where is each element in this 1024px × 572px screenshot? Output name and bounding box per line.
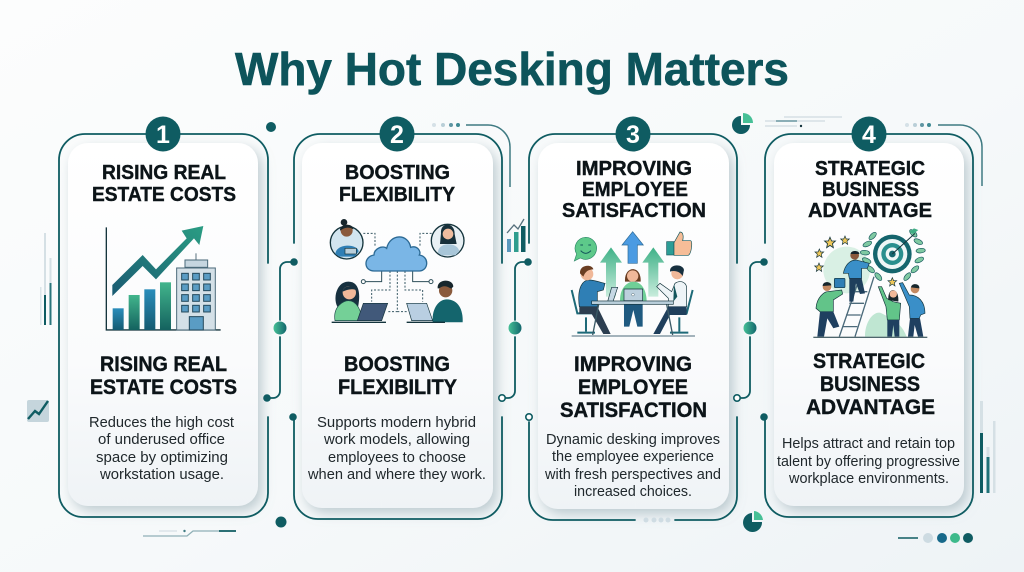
decor: left vertical bars <box>40 233 52 325</box>
body text 3: the employee experience <box>552 449 714 465</box>
badge 4: 4 <box>862 121 876 149</box>
heading 2 bottom: BOOSTING <box>344 353 450 376</box>
badge 3 <box>616 116 650 152</box>
icon: rising chart and building <box>106 226 221 330</box>
body text 1: space by optimizing <box>96 450 228 466</box>
heading 2 top: FLEXIBILITY <box>339 184 456 206</box>
body text 2 <box>307 415 486 483</box>
heading 1 top: ESTATE COSTS <box>92 184 236 206</box>
icon: pie chart top <box>732 113 753 134</box>
heading 3 bottom: SATISFACTION <box>560 399 707 422</box>
body text 1: of underused office <box>98 432 225 448</box>
decor: bottom right dots <box>898 533 973 543</box>
heading 1 top: RISING REAL <box>102 162 226 184</box>
card 1 outline <box>59 134 268 517</box>
decor: bottom dot <box>276 516 286 528</box>
heading 1 bottom: ESTATE COSTS <box>90 376 237 399</box>
heading 4 bottom: ADVANTAGE <box>806 396 935 419</box>
badge 3: 3 <box>626 121 640 149</box>
decor: lines under panel 1 <box>143 530 236 536</box>
body text 2: work models, allowing <box>323 432 470 448</box>
icon: cloud with remote workers <box>330 219 464 322</box>
heading 3 top: IMPROVING <box>576 158 692 180</box>
card 3 outline <box>529 134 737 520</box>
badge 2: 2 <box>390 121 404 149</box>
heading 4 top: BUSINESS <box>822 179 919 201</box>
heading 3 top: SATISFACTION <box>562 200 706 222</box>
heading 4 bottom: STRATEGIC <box>813 350 925 373</box>
decor: small teal dot <box>266 122 276 132</box>
body text 2: when and where they work. <box>307 467 486 483</box>
badge 2 <box>380 116 414 152</box>
heading 4 top <box>808 158 932 222</box>
connector: panel 1 to 2 <box>263 258 298 421</box>
heading 2 top: BOOSTING <box>345 162 450 184</box>
card 1 background <box>68 143 258 506</box>
card 4 outline <box>765 134 973 517</box>
dots in card 3 outline <box>644 518 670 522</box>
body text 4: workplace environments. <box>788 471 949 487</box>
icon: team meeting with rising arrows <box>572 232 695 336</box>
body text 4 <box>777 436 960 487</box>
icon: team reaching target with ladder <box>813 228 927 337</box>
card 2 background <box>302 143 493 508</box>
heading 4 bottom <box>806 350 935 419</box>
heading 4 top: ADVANTAGE <box>808 200 932 222</box>
card 3 background <box>538 143 729 509</box>
card 4 background <box>774 143 964 506</box>
panel: strategic business advantage <box>765 116 973 517</box>
heading 3 bottom: IMPROVING <box>574 353 692 376</box>
decor: lines above panel 4 <box>765 117 842 127</box>
body text 1 <box>89 415 234 483</box>
heading 2 top <box>339 162 456 206</box>
badge 1 <box>146 116 180 152</box>
body text 4: talent by offering progressive <box>777 454 960 470</box>
heading 3 top: EMPLOYEE <box>582 179 688 201</box>
body text 2: employees to choose <box>328 450 466 466</box>
icon: pie chart bottom <box>743 511 763 532</box>
body text 1: workstation usage. <box>99 467 224 483</box>
heading 1 bottom <box>90 353 237 399</box>
decor: dots and curve above right <box>905 123 982 186</box>
heading 1 top <box>92 162 236 206</box>
icon: trend tile <box>27 400 49 422</box>
heading 1 bottom: RISING REAL <box>100 353 227 376</box>
title: Why Hot Desking Matters <box>235 43 789 95</box>
heading 2 bottom: FLEXIBILITY <box>338 376 457 399</box>
body text 3: increased choices. <box>574 484 692 500</box>
panel: rising real estate costs <box>59 116 268 517</box>
body text 3: Dynamic desking improves <box>546 432 720 448</box>
heading 4 top: STRATEGIC <box>815 158 925 180</box>
heading 2 bottom <box>338 353 457 399</box>
badge 1: 1 <box>156 121 170 149</box>
body text 2: Supports modern hybrid <box>317 415 476 431</box>
panel: improving employee satisfaction <box>529 116 737 522</box>
connector: panel 3 to 4 <box>734 258 768 421</box>
body text 3: with fresh perspectives and <box>544 467 721 483</box>
body text 3 <box>544 432 721 500</box>
body text 1: Reduces the high cost <box>89 415 234 431</box>
heading 4 bottom: BUSINESS <box>820 373 920 396</box>
connector: panel 2 to 3 <box>499 258 532 420</box>
badge 4 <box>852 116 886 152</box>
heading 3 top <box>562 158 706 222</box>
panel: boosting flexibility <box>294 116 502 519</box>
card 2 outline <box>294 134 502 519</box>
decor: dots and curve above panel 2 <box>432 123 510 187</box>
icon: mini bar chart <box>507 219 526 252</box>
heading 3 bottom <box>560 353 707 422</box>
heading 3 bottom: EMPLOYEE <box>578 376 688 399</box>
decor: right vertical bars <box>980 401 996 493</box>
body text 4: Helps attract and retain top <box>782 436 955 452</box>
